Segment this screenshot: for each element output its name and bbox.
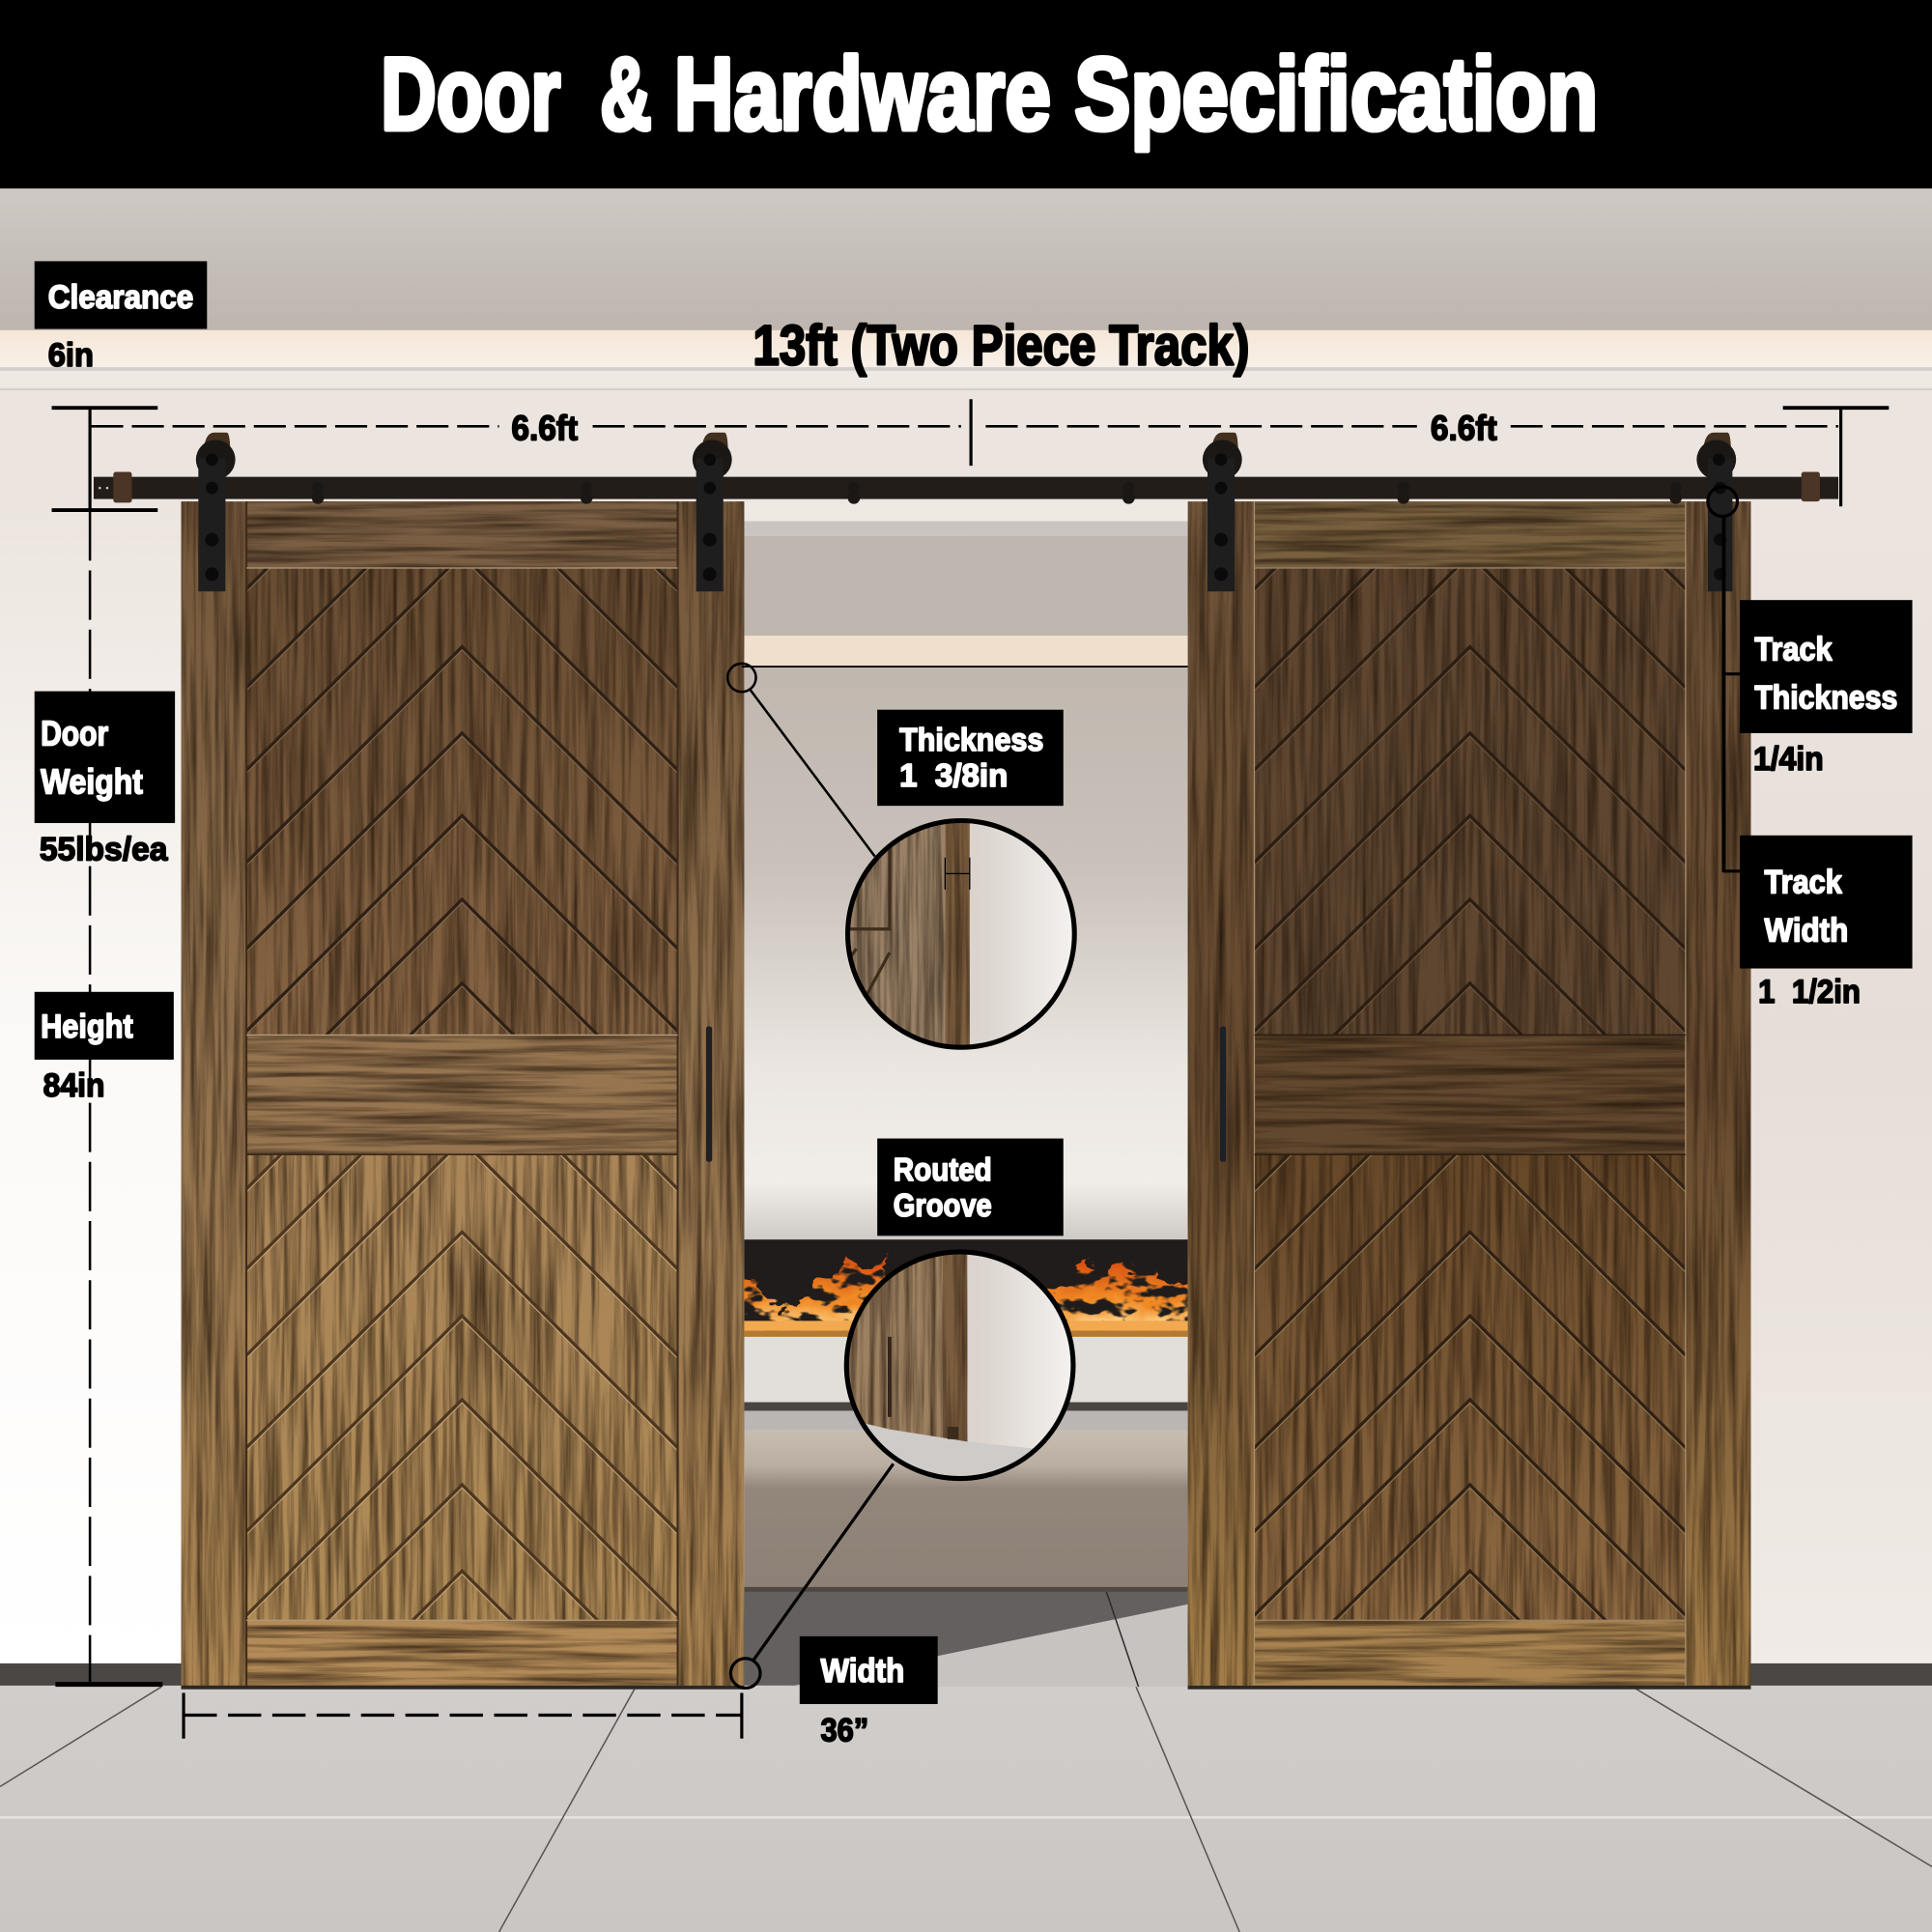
title: Door [381,36,560,152]
label: door weight: Door [41,715,108,753]
heading: track length: 13ft (Two Piece Track) [753,315,1249,378]
label: thickness: 1 3/8in [899,758,1008,794]
leader lines and pointer circles [727,487,1740,1688]
icon: hanger 1 [196,433,236,591]
label: thickness [877,710,1064,806]
label: width [800,1636,938,1704]
label: height [35,992,174,1060]
icon: right flames [1047,1257,1193,1336]
label: track thickness: Thickness [1754,679,1897,716]
label: track thickness [1740,600,1913,733]
icon: left flames [739,1254,912,1336]
label: routed groove [877,1139,1064,1236]
rails [246,501,678,1686]
panel: right door [1188,501,1750,1686]
title: & [600,36,652,152]
callout: routed groove magnifier [844,1250,1076,1482]
value: track thickness: 1/4in [1753,741,1824,778]
label: clearance: Clearance [48,279,193,316]
icon: sliding track with stoppers and bolts [94,472,1838,504]
icon: left door handle [706,1026,712,1162]
upper chevron panel [247,568,676,1035]
value: door weight: 55lbs/ea [40,831,168,867]
callout: thickness magnifier [845,818,1077,1050]
lower chevron panel [1255,1155,1685,1620]
value: height: 84in [43,1067,104,1104]
label: routed groove: Routed [894,1152,992,1188]
label: routed groove: Groove [894,1188,992,1224]
lower chevron panel [247,1155,676,1620]
upper chevron panel [1255,568,1685,1035]
shadows under the doors [182,1686,1750,1690]
icon: hanger 3 [1203,433,1242,591]
label: width: Width [820,1653,904,1690]
label: left half track: 6.6ft [511,409,578,447]
title: Hardware [674,36,1051,152]
door width dimension line [184,1693,742,1739]
value: width: 36” [820,1712,868,1748]
label: track thickness: Track [1754,632,1833,668]
track dimension lines [52,399,1889,511]
icon: hanger 4 [1696,433,1736,591]
panel: left door [182,501,744,1686]
label: door weight: Weight [41,762,143,801]
title band [0,0,1932,188]
title [381,36,1598,152]
label: thickness: Thickness [899,723,1043,758]
value: track width: 1 1/2in [1758,974,1861,1010]
label: door weight [35,692,175,823]
label: clearance [35,261,207,329]
label: track width: Width [1765,912,1848,949]
icon: hanger 2 [693,433,732,591]
label: track width: Track [1765,865,1843,901]
value: clearance: 6in [48,337,94,374]
label: track width [1740,836,1913,969]
label: right half track: 6.6ft [1431,409,1497,447]
door height dimension line [55,511,162,1685]
view through opening: room with fireplace [739,501,1193,1687]
icon: right door handle [1220,1026,1226,1162]
rails [1254,501,1686,1686]
label: height: Height [41,1009,133,1045]
title: Specification [1074,36,1598,152]
